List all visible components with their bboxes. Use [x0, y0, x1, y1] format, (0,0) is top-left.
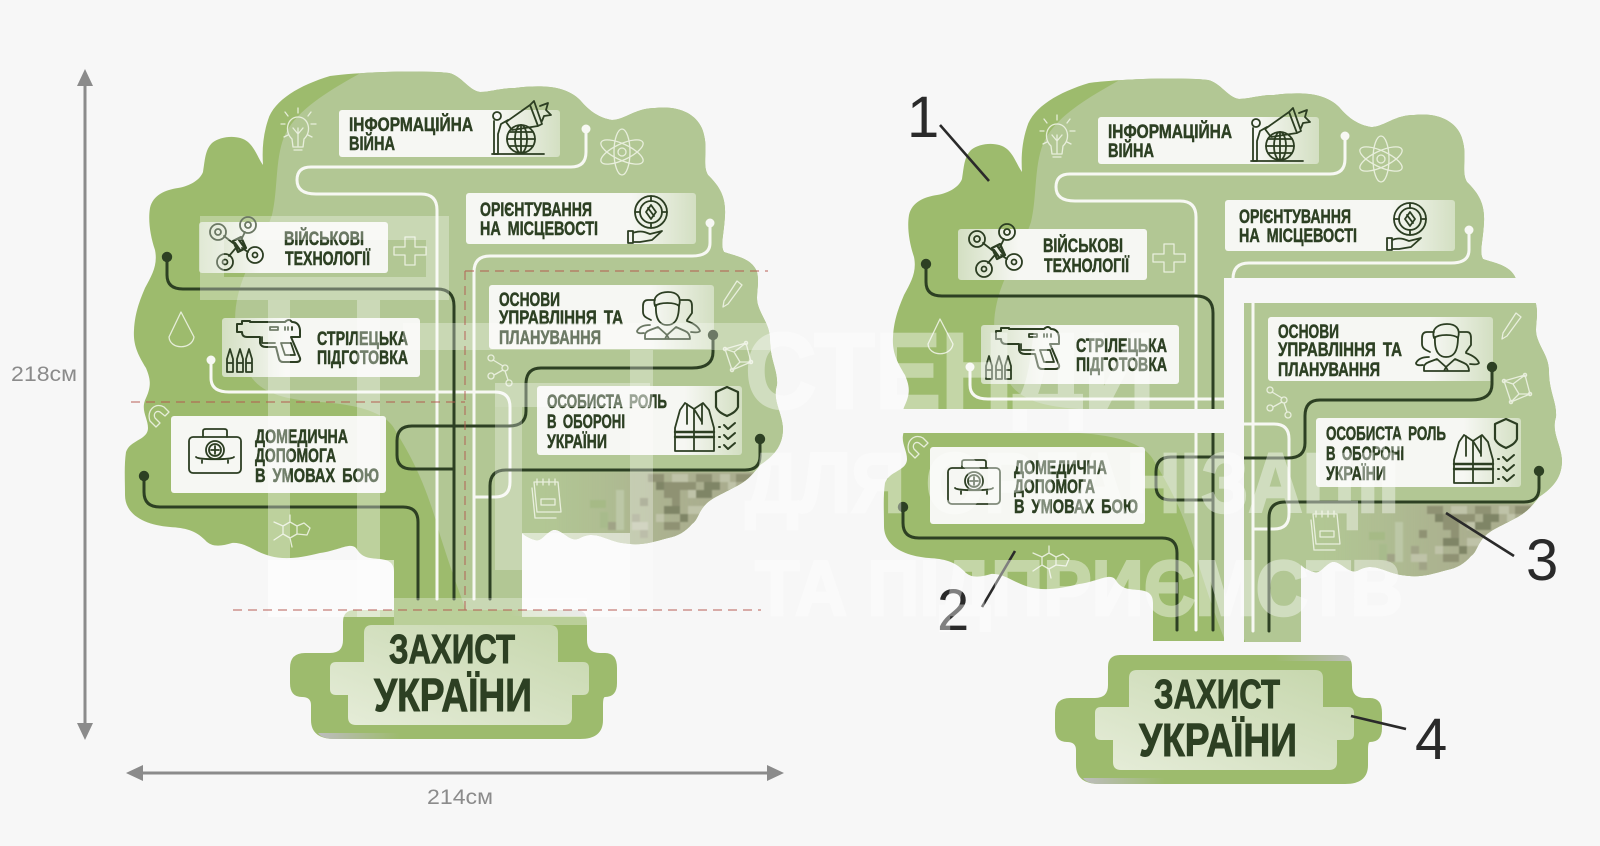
panel: first aid [171, 416, 386, 493]
right stand: panel labels: УПРАВЛІННЯ ТА [1278, 339, 1402, 361]
icon: cone [169, 312, 194, 347]
red cut guide lines [131, 271, 768, 610]
watermark logo blocks over left stand [200, 216, 770, 625]
right stand: panel labels [1014, 119, 1446, 518]
right stand: panel labels: ОСНОВИ [1278, 321, 1339, 343]
callout 4 [1351, 707, 1447, 772]
icon: cube [723, 341, 753, 372]
right stand: panel labels: ПІДГОТОВКА [1076, 354, 1167, 376]
right stand: panel labels: ОРІЄНТУВАННЯ [1239, 206, 1351, 228]
right stand: base title: ЗАХИСТ [1154, 671, 1280, 717]
right stand: panel labels: ВІЙСЬКОВІ [1043, 233, 1123, 257]
dimension arrow: width [126, 765, 784, 781]
icon: plus outline [394, 237, 426, 265]
left stand: base title [374, 626, 532, 721]
left stand: panel labels: ВІЙНА [349, 131, 395, 155]
right stand: panel labels: В ОБОРОНІ [1326, 443, 1404, 465]
icon: pistol and bullets [227, 320, 300, 372]
right stand: crown piece [892, 78, 1516, 409]
right stand: panel labels: СТРІЛЕЦЬКА [1076, 335, 1167, 357]
right stand: panel labels: ВІЙНА [1108, 138, 1154, 162]
watermark text: ДЛЯ ОРГАНІЗАЦІЇ [745, 436, 1401, 530]
panel: orienteering [466, 193, 696, 244]
camouflage patch [545, 472, 785, 547]
watermark text: ТА ПІДПРИЄМСТВ [755, 544, 1403, 632]
left stand: tree crown and trunk [125, 60, 800, 612]
right stand: base sign [1055, 655, 1382, 784]
right stand: panel labels: ТЕХНОЛОГІЇ [1044, 254, 1129, 277]
left stand: panel labels: ПІДГОТОВКА [317, 347, 408, 369]
icon: megaphone and globe [492, 101, 551, 154]
icon: vest, shield and checklist [675, 387, 738, 451]
callout 3 [1446, 513, 1558, 593]
left stand: panel labels: В ОБОРОНІ [547, 411, 625, 433]
right stand: lower left piece [884, 433, 1224, 641]
right stand: panel labels: НА МІСЦЕВОСТІ [1239, 225, 1357, 247]
icon: pencil [723, 281, 742, 307]
left stand: panel labels: ДОПОМОГА [255, 445, 336, 467]
right stand: panel labels: УКРАЇНИ [1326, 462, 1386, 485]
left stand: base title: УКРАЇНИ [374, 669, 532, 721]
left stand: base title: ЗАХИСТ [389, 626, 515, 672]
callout 4: 4 [1415, 707, 1447, 772]
icon: magnet [149, 405, 169, 427]
callout 2 [937, 551, 1015, 643]
dimension arrow: height [77, 69, 93, 740]
right stand: base title: УКРАЇНИ [1139, 714, 1297, 766]
dimension label: 214 cm: 214см [427, 786, 493, 809]
left stand: panel labels: НА МІСЦЕВОСТІ [480, 218, 598, 240]
icon: atom [598, 129, 646, 175]
callout 1: 1 [907, 85, 939, 150]
panel: military technology [199, 217, 388, 273]
watermark text [745, 310, 1403, 632]
left stand: panel labels: ІНФОРМАЦІЙНА [349, 112, 473, 136]
callout 3: 3 [1526, 528, 1558, 593]
icon: drone [210, 217, 263, 270]
left stand: panel labels [255, 112, 667, 487]
dark connector lines [139, 252, 765, 599]
base silhouette [290, 610, 617, 739]
panel: personal role in defence [537, 386, 742, 455]
tree silhouette [125, 72, 783, 610]
left stand: panel labels: ВІЙСЬКОВІ [284, 226, 364, 250]
left stand: panel labels: ОРІЄНТУВАННЯ [480, 199, 592, 221]
icon: benzene molecule [274, 515, 310, 547]
panel: information war [339, 101, 560, 157]
icon: notepad [532, 479, 561, 518]
panel: shooting training [222, 318, 420, 377]
light crown area [235, 60, 800, 612]
icon: light bulb [281, 108, 316, 150]
right stand: right piece [1244, 303, 1562, 642]
right stand: base title [1139, 671, 1297, 766]
left stand: panel labels: УПРАВЛІННЯ ТА [499, 307, 623, 329]
left stand: base sign [290, 610, 617, 739]
white connector lines [206, 124, 714, 599]
left stand: panel labels: ДОМЕДИЧНА [255, 426, 348, 448]
watermark text: СТЕНДИ [745, 310, 1155, 431]
right stand: panel labels: В УМОВАХ БОЮ [1014, 496, 1138, 518]
left stand: panel labels: УКРАЇНИ [547, 430, 607, 453]
dimension label: 218 cm: 218см [11, 363, 77, 386]
left stand: panel labels: ОСОБИСТА РОЛЬ [547, 391, 667, 413]
base inner plate [330, 625, 589, 725]
left stand: panel labels: ОСНОВИ [499, 289, 560, 311]
icon: group of soldiers [637, 292, 700, 339]
left stand: panel labels: В УМОВАХ БОЮ [255, 465, 379, 487]
callout 2: 2 [937, 578, 969, 643]
callout 1 [907, 85, 989, 181]
icon: first aid kit [189, 429, 241, 473]
right stand: panel labels: ОСОБИСТА РОЛЬ [1326, 423, 1446, 445]
left stand: panel labels: ПЛАНУВАННЯ [499, 327, 601, 349]
right stand: panel labels: ПЛАНУВАННЯ [1278, 359, 1380, 381]
right stand: panel labels: ДОПОМОГА [1014, 476, 1095, 498]
right stand: panel labels: ДОМЕДИЧНА [1014, 457, 1107, 479]
icon: molecule [488, 355, 512, 386]
icon: compass in hand [628, 196, 667, 243]
panel: basics of command [489, 285, 714, 349]
base grey edges [318, 733, 400, 739]
right stand: panel labels: ІНФОРМАЦІЙНА [1108, 119, 1232, 143]
left stand: panel labels: СТРІЛЕЦЬКА [317, 328, 408, 350]
left stand: panel labels: ТЕХНОЛОГІЇ [285, 247, 370, 270]
